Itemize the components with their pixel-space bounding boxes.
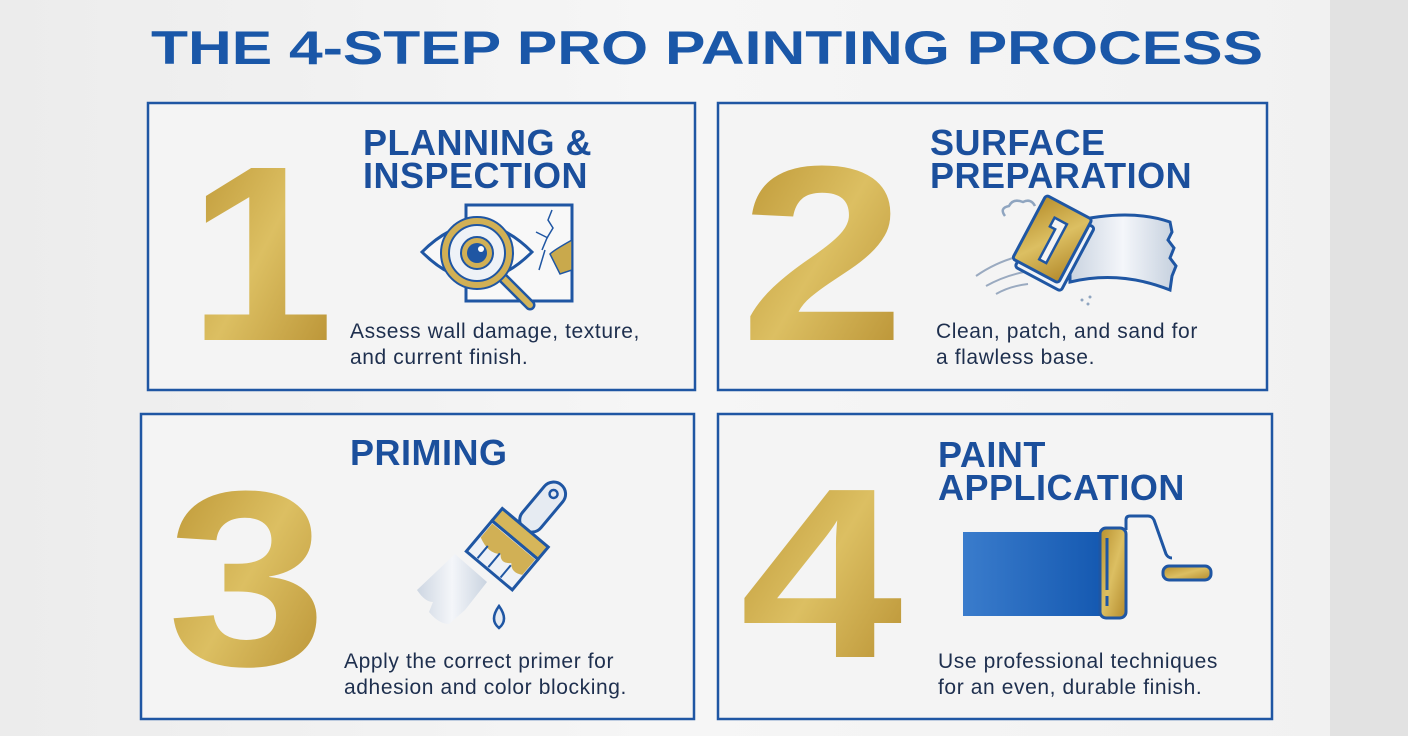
text 4: for an even, durable finish. [938,676,1202,699]
panel: step 4 paint application [718,414,1272,719]
icon: paint roller [963,516,1211,618]
text 2: Clean, patch, and sand for [936,320,1198,343]
number 4: 4 [740,438,905,708]
heading 3: PRIMING [350,432,508,473]
panel: step 2 surface preparation [718,103,1267,394]
heading 4: APPLICATION [938,467,1185,508]
icon: paint brush [417,466,584,628]
text 2: a flawless base. [936,346,1095,369]
text 3: adhesion and color blocking. [344,676,627,699]
icon: sanding block [976,195,1176,306]
panel: step 1 planning [148,103,695,394]
heading 2: PREPARATION [930,155,1192,196]
number 1: 1 [188,115,334,394]
title: THE 4-STEP PRO PAINTING PROCESS [151,21,1263,74]
heading 1: INSPECTION [363,155,588,196]
icon: eye with magnifier and cracked wall [422,205,572,305]
number 3: 3 [167,440,327,719]
text 1: Assess wall damage, texture, [350,320,640,343]
heading 1: PLANNING & [363,122,592,163]
panel: step 3 priming [141,414,694,719]
text 3: Apply the correct primer for [344,650,614,673]
number 2: 2 [740,114,905,394]
heading 4: PAINT [938,434,1046,475]
heading 2: SURFACE [930,122,1106,163]
text 1: and current finish. [350,346,528,369]
text 4: Use professional techniques [938,650,1218,673]
